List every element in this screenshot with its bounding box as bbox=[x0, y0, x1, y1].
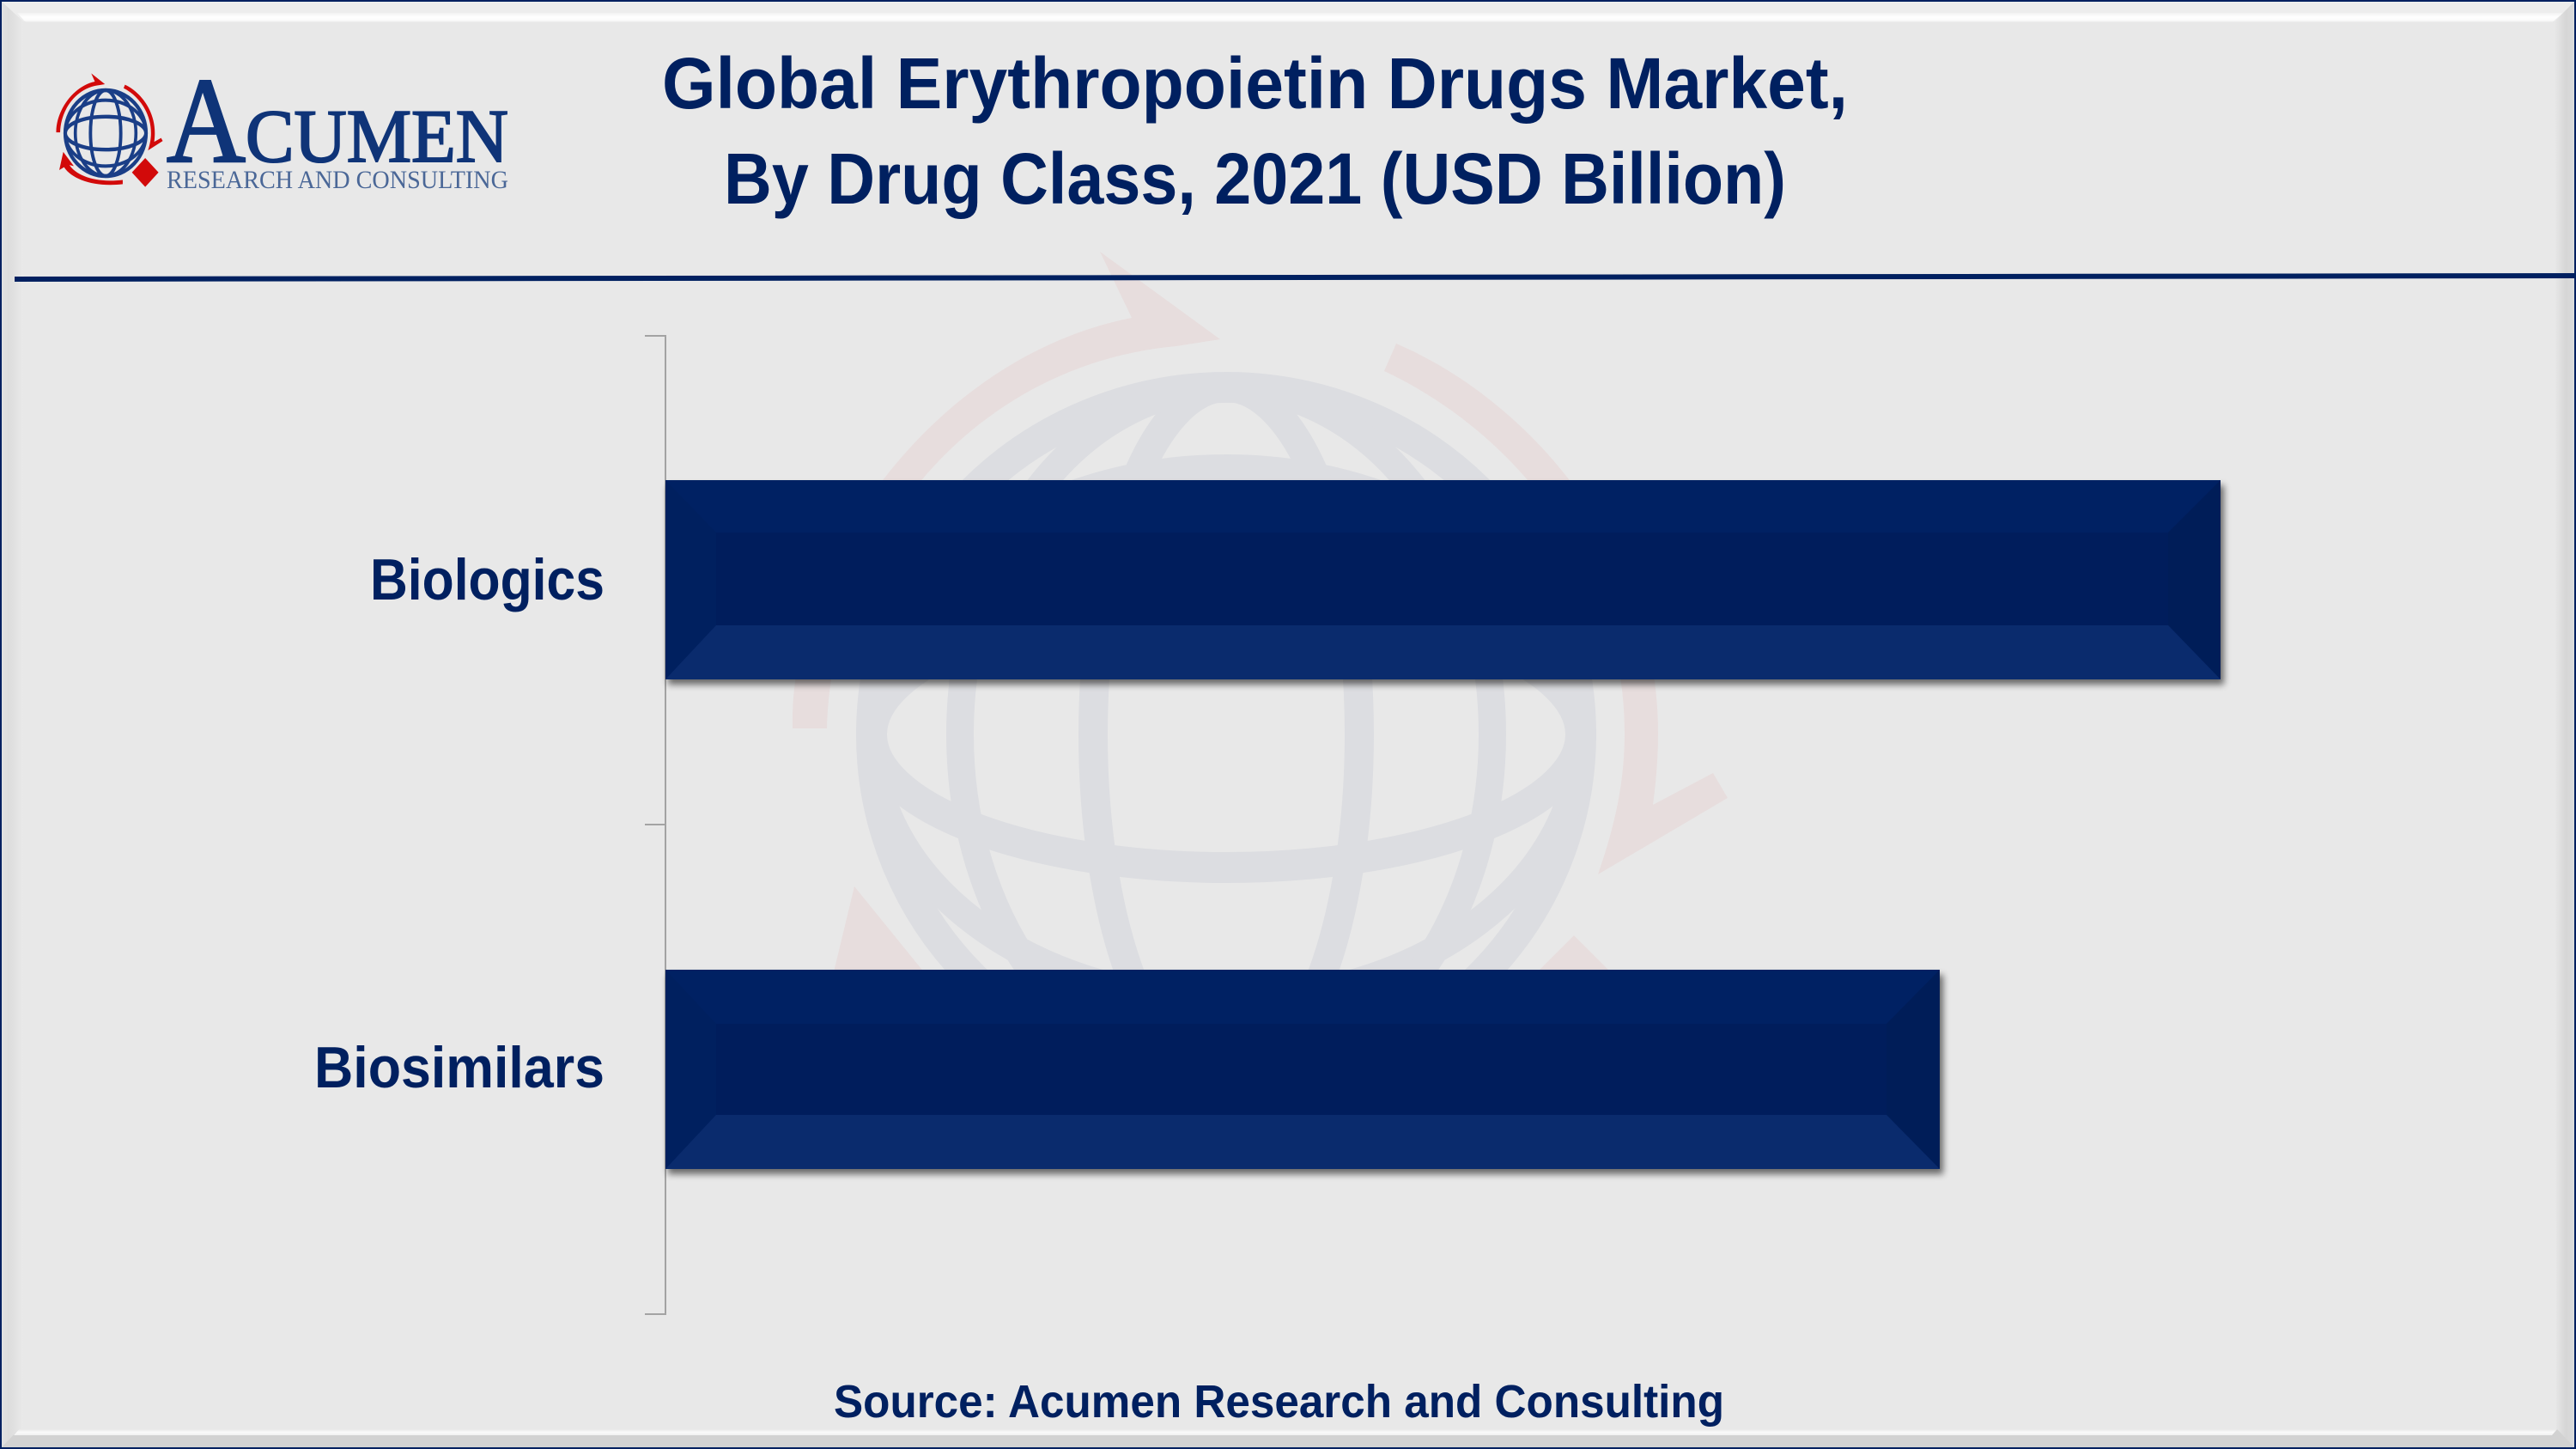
title bbox=[662, 43, 1848, 219]
logo wordmark: CUMEN bbox=[246, 95, 508, 179]
logo wordmark: A bbox=[167, 52, 246, 188]
logo wordmark: RESEARCH AND CONSULTING bbox=[167, 166, 508, 194]
chart: horizontal bars by drug class bbox=[314, 336, 2224, 1314]
title: Global Erythropoietin Drugs Market, bbox=[662, 43, 1848, 124]
header divider bbox=[15, 273, 2576, 282]
category axis bbox=[645, 336, 665, 1314]
logo wordmark bbox=[167, 52, 508, 194]
label: Biosimilars: Biosimilars bbox=[314, 1035, 605, 1100]
label: Biologics: Biologics bbox=[370, 547, 605, 612]
bar: Biosimilars bbox=[665, 970, 1943, 1174]
title: By Drug Class, 2021 (USD Billion) bbox=[724, 138, 1786, 219]
logo bbox=[56, 52, 508, 194]
icon: globe with red arrows and diamond bbox=[56, 73, 163, 187]
bar: Biologics bbox=[665, 480, 2224, 685]
watermark: faded logo bbox=[793, 252, 1728, 1169]
source note: Source: Acumen Research and Consulting bbox=[834, 1376, 1724, 1428]
